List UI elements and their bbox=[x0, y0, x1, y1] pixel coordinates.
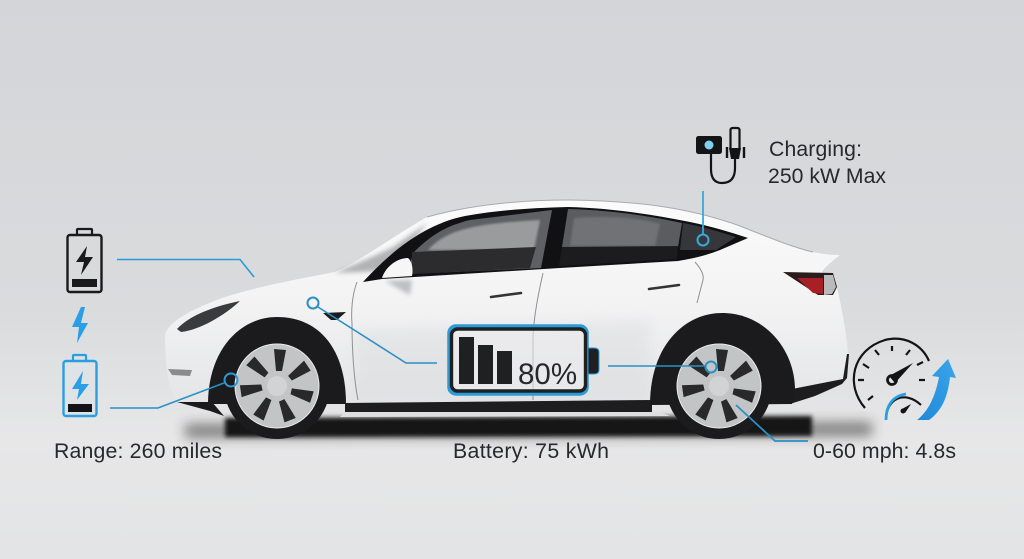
label: charging: Charging: bbox=[769, 138, 862, 161]
rear wheel arch bbox=[650, 313, 795, 405]
rocker panel bbox=[345, 400, 652, 412]
ground shadow bbox=[185, 416, 872, 438]
gauge bars bbox=[459, 337, 512, 384]
window frame bbox=[363, 207, 748, 282]
callout: range leader lines bbox=[110, 260, 254, 408]
front wheel bbox=[224, 333, 330, 439]
callout: acceleration leader line bbox=[736, 405, 808, 441]
label: range: Range: 260 miles bbox=[54, 439, 222, 463]
quarter window bbox=[680, 223, 736, 250]
label: acceleration: 0-60 mph: 4.8s bbox=[813, 439, 956, 463]
rear diffuser bbox=[790, 354, 849, 404]
side mirror bbox=[382, 258, 413, 278]
front wheel arch bbox=[208, 317, 346, 404]
label: battery: Battery: 75 kWh bbox=[453, 439, 609, 463]
icon: acceleration arrow bbox=[917, 359, 956, 420]
rear wheel bbox=[666, 333, 772, 439]
roof edge highlight bbox=[427, 200, 813, 252]
callout: charging leader line bbox=[698, 191, 708, 246]
icon: charger and plug bbox=[696, 128, 744, 183]
gauge percentage: 80% bbox=[518, 358, 577, 391]
door seams bbox=[352, 262, 703, 400]
light sill strip bbox=[340, 412, 670, 417]
battery gauge: 80% bbox=[449, 326, 599, 394]
side marker bbox=[323, 312, 346, 320]
rear window bbox=[559, 209, 682, 266]
mirror shadow bbox=[385, 280, 412, 295]
windshield strip bbox=[335, 223, 427, 273]
tail light bbox=[783, 272, 837, 295]
front lower valance bbox=[177, 402, 224, 416]
icon: speedometer bbox=[854, 339, 929, 420]
icon: low battery blue bbox=[64, 355, 96, 416]
door handles bbox=[491, 285, 679, 297]
fog marker bbox=[168, 369, 192, 376]
icon: blue lightning bolt bbox=[72, 307, 88, 343]
headlight bbox=[177, 301, 240, 332]
callout: battery leader lines bbox=[308, 298, 716, 372]
front window bbox=[408, 210, 552, 274]
lower door shading bbox=[355, 320, 650, 400]
car bbox=[165, 200, 849, 439]
infographic: electric car specifications: 250 kW Max bbox=[768, 165, 886, 188]
icon: charged battery black bbox=[68, 229, 102, 292]
car body bbox=[165, 200, 848, 404]
